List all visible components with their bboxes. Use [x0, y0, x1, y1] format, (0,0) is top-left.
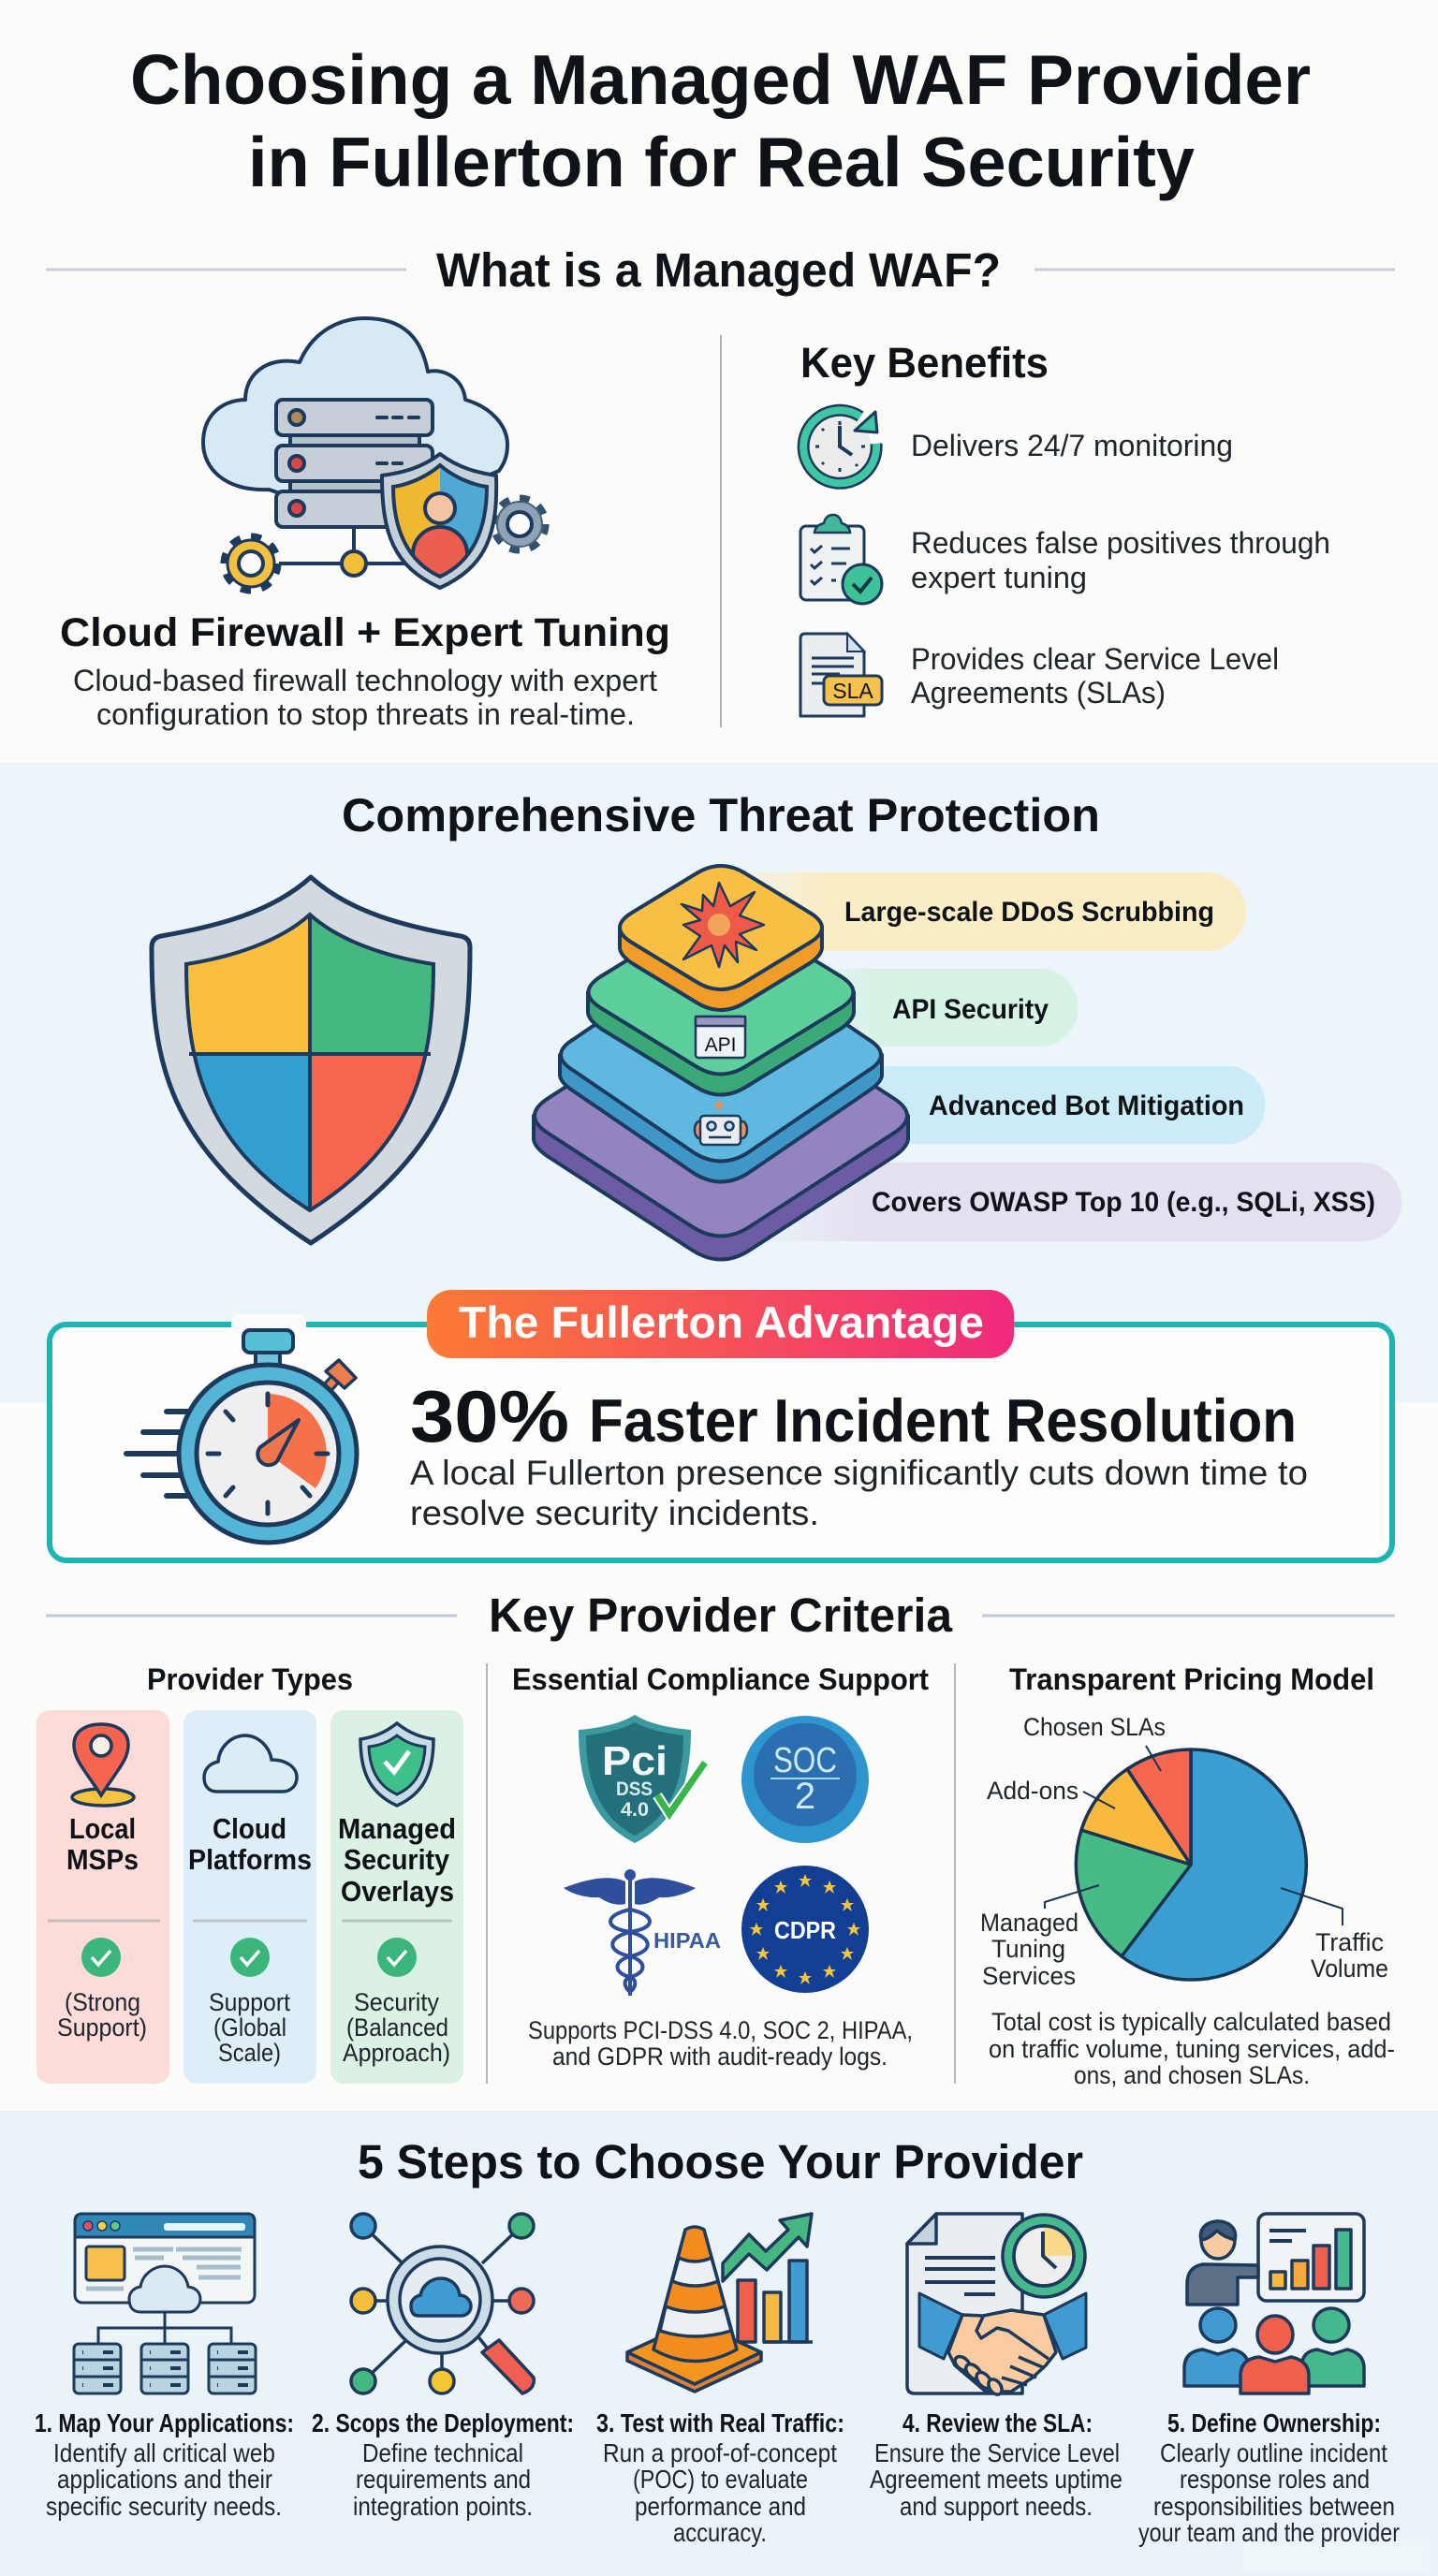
pie labels: Services [982, 1962, 1076, 1990]
icon: stopwatch [126, 1330, 357, 1543]
text: Agreement meets uptime [870, 2465, 1123, 2494]
text [870, 2408, 1123, 2521]
badge: SOC 2: SOC [773, 1741, 837, 1780]
callout box [50, 1325, 1392, 1560]
text: response roles and [1180, 2465, 1370, 2494]
text: requirements and [356, 2465, 531, 2494]
card: cloud platforms: Support [209, 1988, 290, 2016]
card: local MSPs: (Strong [65, 1988, 140, 2016]
card: cloud platforms [183, 1710, 316, 2084]
pie labels: Add-ons [987, 1777, 1078, 1805]
badge: SOC 2: 2 [795, 1776, 815, 1817]
section heading: key provider criteria: Key Provider Criteria [489, 1588, 953, 1642]
heading: Key Benefits [800, 339, 1049, 387]
pill: API [824, 969, 1078, 1046]
pill: bot: Advanced Bot Mitigation [929, 1090, 1244, 1121]
text [35, 2408, 294, 2521]
badge: The Fullerton Advantage [459, 1297, 984, 1347]
icon: robot [695, 1102, 747, 1145]
heading: comprehensive threat protection: Comprehensive Threat Protection [342, 789, 1100, 842]
text [312, 2408, 574, 2521]
icon: cone and chart [627, 2214, 813, 2392]
gear yellow [227, 539, 275, 588]
step 1 [35, 2214, 294, 2521]
text: 4. Review the SLA: [902, 2408, 1093, 2437]
card: cloud platforms: (Global [213, 2013, 286, 2042]
icon: large shield [152, 877, 470, 1243]
text: 5. Define Ownership: [1167, 2408, 1381, 2437]
shield with person [382, 454, 496, 588]
icon: ownership team [1184, 2214, 1364, 2393]
pie labels [980, 1713, 1388, 1990]
step 4 [870, 2214, 1123, 2521]
card: managed overlays: Overlays [341, 1875, 454, 1908]
icon: cloud firewall [203, 318, 543, 588]
server stack [276, 400, 433, 527]
card: cloud platforms: Scale) [218, 2039, 281, 2067]
pill: OWASP: Covers OWASP Top 10 (e.g., SQLi, XSS) [872, 1187, 1375, 1218]
description [410, 1454, 1308, 1532]
pie chart [1045, 1746, 1343, 1980]
title: in Fullerton for Real Security [248, 123, 1195, 201]
text: Reduces false positives through [911, 526, 1330, 560]
badge: PCI: Pci [602, 1738, 668, 1784]
layer: blue [560, 949, 882, 1181]
card: cloud platforms: Cloud [213, 1812, 286, 1845]
text: Define technical [362, 2438, 523, 2467]
text: expert tuning [911, 561, 1087, 594]
text [596, 2408, 844, 2547]
caption: and GDPR with audit-ready logs. [552, 2042, 888, 2071]
card: local MSPs: MSPs [66, 1843, 139, 1876]
text: Clearly outline incident [1160, 2438, 1387, 2467]
caption: Supports PCI-DSS 4.0, SOC 2, HIPAA, [528, 2016, 913, 2044]
badge: PCI: 4.0 [621, 1799, 649, 1821]
text: Provides clear Service Level [911, 642, 1279, 676]
step 2 [312, 2214, 574, 2521]
stat headline: 30% [410, 1375, 569, 1457]
text: and support needs. [900, 2492, 1093, 2521]
icon: explosion [682, 883, 764, 967]
caption [528, 2016, 913, 2071]
step 5 [1138, 2214, 1430, 2571]
icon: clock [803, 410, 877, 483]
description: resolve security incidents. [410, 1494, 819, 1532]
caption [989, 2008, 1395, 2089]
text [911, 642, 1279, 710]
pill: API: API Security [892, 994, 1049, 1025]
pie labels: Tuning [991, 1935, 1065, 1963]
text: accuracy. [673, 2518, 767, 2547]
pill: DDoS: Large-scale DDoS Scrubbing [844, 897, 1214, 928]
text [911, 526, 1330, 594]
text block: cloud firewall: configuration to stop threats in real-time. [96, 697, 635, 731]
badge: GDPR: CDPR [774, 1916, 836, 1944]
text: performance and [635, 2492, 806, 2521]
badge: PCI: DSS [616, 1778, 653, 1800]
card: local MSPs: Local [69, 1812, 136, 1845]
panel: key benefits [800, 339, 1330, 716]
cloud [203, 318, 507, 524]
heading: 5 steps: 5 Steps to Choose Your Provider [358, 2135, 1083, 2188]
connector lines [279, 527, 405, 564]
icon: SLA document [800, 634, 882, 716]
caption: Total cost is typically calculated based [991, 2008, 1391, 2036]
description: A local Fullerton presence significantly cuts down time to [410, 1454, 1308, 1492]
stat headline: Faster Incident Resolution [589, 1386, 1297, 1455]
text: responsibilities between [1153, 2492, 1395, 2521]
pie labels: Volume [1311, 1954, 1388, 1983]
heading: Transparent Pricing Model [1009, 1662, 1374, 1696]
card: managed overlays: Approach) [343, 2039, 450, 2067]
threat pills [749, 872, 1401, 1241]
icon: scope [351, 2214, 534, 2393]
layer: green [588, 910, 854, 1095]
patch behind last line [1242, 2539, 1430, 2571]
layer: yellow [620, 866, 822, 1010]
text [1138, 2408, 1400, 2547]
step 3 [596, 2214, 844, 2547]
text: 2. Scops the Deployment: [312, 2408, 574, 2437]
pill: OWASP [772, 1163, 1401, 1241]
icon: API window [696, 1017, 745, 1058]
icon: SLA document: SLA [832, 679, 873, 703]
pill: DDoS [749, 872, 1246, 951]
pie labels: Managed [980, 1909, 1078, 1937]
text: (POC) to evaluate [633, 2465, 808, 2494]
panel: Fullerton advantage [50, 1290, 1392, 1560]
card: managed overlays: Managed [338, 1812, 456, 1845]
card: local MSPs [37, 1710, 169, 2084]
badge: HIPAA: HIPAA [653, 1928, 721, 1953]
section heading: What is a Managed WAF: What is a Managed WAF? [436, 243, 1001, 297]
text: Identify all critical web [53, 2438, 275, 2467]
caption: on traffic volume, tuning services, add- [989, 2035, 1395, 2063]
text block: cloud firewall [60, 610, 670, 731]
heading: Essential Compliance Support [512, 1662, 929, 1696]
icon: API window: API [705, 1034, 736, 1056]
text: 3. Test with Real Traffic: [596, 2408, 844, 2437]
pill: bot [824, 1066, 1266, 1144]
text: Agreements (SLAs) [911, 676, 1166, 710]
badge: GDPR [741, 1866, 869, 1993]
title [130, 40, 1311, 201]
badge: HIPAA [564, 1869, 721, 1996]
card: local MSPs: Support) [57, 2013, 147, 2042]
badge: SOC 2 [741, 1716, 869, 1843]
text: Ensure the Service Level [874, 2438, 1120, 2467]
icon: map applications [74, 2214, 256, 2393]
text: 1. Map Your Applications: [35, 2408, 294, 2437]
icon: clipboard [800, 515, 882, 604]
panel: pricing [980, 1662, 1395, 2089]
layer: purple [534, 996, 908, 1260]
text block: cloud firewall: Cloud-based firewall technology with expert [73, 664, 657, 697]
caption: ons, and chosen SLAs. [1074, 2061, 1310, 2089]
card: managed overlays: Security [354, 1988, 439, 2016]
badge [427, 1290, 1014, 1358]
gear grey [496, 501, 543, 548]
icon: SLA handshake [907, 2214, 1086, 2397]
card: managed overlays: (Balanced [346, 2013, 448, 2042]
text block: cloud firewall: Cloud Firewall + Expert Tuning [60, 610, 670, 655]
panel: provider types [37, 1662, 463, 2084]
pie labels: Traffic [1315, 1928, 1384, 1956]
text: Run a proof-of-concept [603, 2438, 837, 2467]
text: specific security needs. [46, 2492, 282, 2521]
panel: compliance [512, 1662, 929, 2071]
title: Choosing a Managed WAF Provider [130, 40, 1311, 119]
card: managed overlays [330, 1710, 463, 2084]
heading: Provider Types [147, 1662, 353, 1696]
text: integration points. [353, 2492, 533, 2521]
text: Delivers 24/7 monitoring [911, 429, 1233, 462]
badge: PCI [579, 1715, 705, 1843]
text: applications and their [57, 2465, 272, 2494]
layered stack [534, 866, 908, 1260]
stat headline [410, 1375, 1297, 1457]
card: managed overlays: Security [344, 1843, 450, 1876]
card: cloud platforms: Platforms [188, 1843, 312, 1876]
pie labels: Chosen SLAs [1023, 1713, 1166, 1741]
